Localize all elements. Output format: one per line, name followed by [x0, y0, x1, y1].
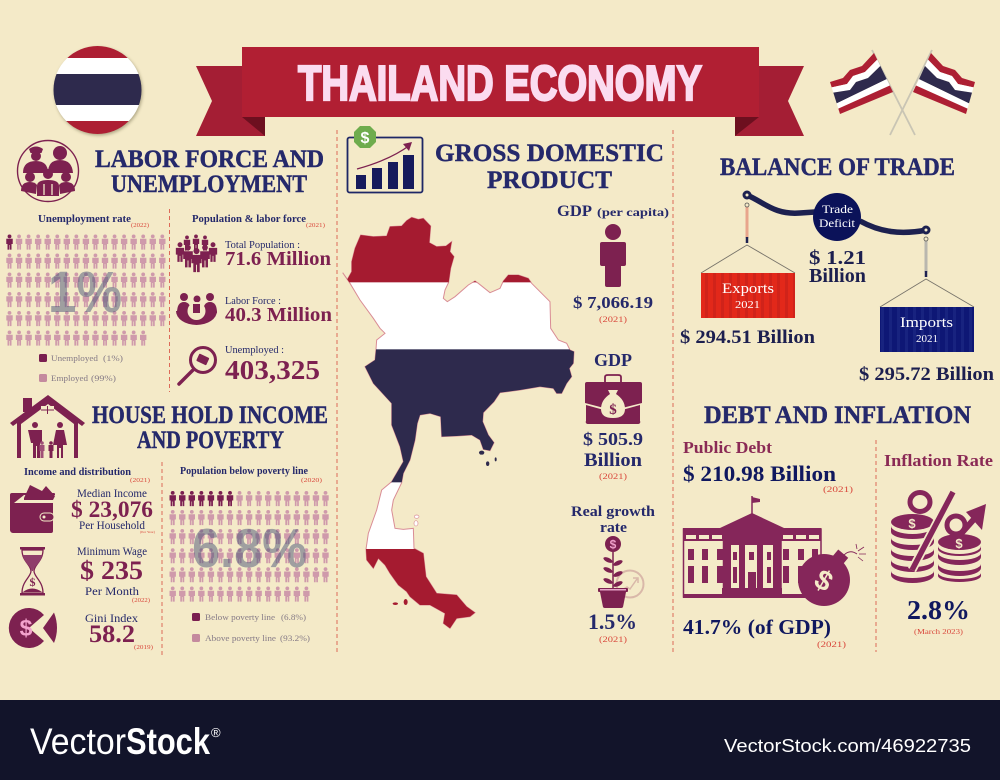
- minimum wage: Per Month: [85, 584, 139, 598]
- heading: DEBT AND INFLATION: [704, 402, 971, 429]
- gdp value: (2021): [599, 471, 627, 481]
- icon: government building: [683, 496, 821, 598]
- gdp per capita value: (2021): [599, 314, 627, 324]
- heading: BALANCE OF TRADE: [720, 154, 955, 181]
- minimum wage: Minimum Wage: [77, 546, 147, 558]
- footer logo: [30, 721, 221, 762]
- heading: LABOR FORCE AND: [95, 146, 324, 173]
- footer url: VectorStock.com/46922735: [724, 735, 971, 756]
- debt to gdp: (2021): [817, 639, 846, 649]
- diagram: trade scale: [701, 192, 974, 307]
- public debt value: (2021): [823, 484, 853, 494]
- unemployed: Unemployed :: [225, 345, 284, 356]
- icon: bomb: [798, 544, 866, 606]
- icon: coins and percent: $: [908, 516, 916, 531]
- minimum wage: (2022): [132, 597, 150, 604]
- legend: poverty: (93.2%): [280, 633, 310, 643]
- income label: Income and distribution: [24, 467, 131, 478]
- icon: money plant: $: [610, 538, 617, 552]
- icon: round Thai flag: [50, 44, 146, 136]
- icon: crowd: [176, 234, 217, 272]
- panel: debt and inflation: [683, 402, 993, 649]
- icon: money plant: [598, 536, 644, 608]
- real growth label: rate: [600, 520, 628, 536]
- debt to gdp: 41.7% (of GDP): [683, 615, 831, 639]
- icon: growth chart: $: [361, 130, 370, 147]
- icon: person: [600, 224, 626, 287]
- icon: workers circle: [18, 140, 78, 202]
- median income: Per Household: [79, 520, 145, 532]
- gdp per capita: GDP: [557, 203, 592, 220]
- imports container: Imports: [900, 315, 953, 331]
- unemployment rate label: Unemployment rate: [38, 214, 131, 225]
- heading: [92, 402, 328, 454]
- exports container: 2021: [735, 299, 760, 311]
- panel: gross domestic product: [340, 126, 669, 644]
- gdp value: $ 505.9: [583, 429, 643, 449]
- gdp value: [583, 429, 643, 481]
- gini index: (2019): [134, 644, 153, 651]
- heading: [435, 140, 664, 194]
- icon: labor force gear: [176, 293, 217, 325]
- public debt value: $ 210.98 Billion: [683, 461, 836, 486]
- unemployed: [225, 345, 320, 385]
- heading: GROSS DOMESTIC: [435, 140, 664, 167]
- pictogram: unemployment: [6, 234, 165, 346]
- heading: AND POVERTY: [137, 427, 284, 454]
- footer logo: Stock: [126, 721, 210, 762]
- median income: $ 23,076: [71, 497, 153, 522]
- heading: PRODUCT: [487, 167, 612, 194]
- gini index: 58.2: [89, 621, 135, 648]
- trade deficit badge: Deficit: [819, 216, 856, 230]
- title: THAILAND ECONOMY: [298, 57, 702, 111]
- gdp per capita: (per capita): [597, 205, 669, 219]
- big figure 1%: 1%: [48, 260, 122, 325]
- gdp per capita value: [573, 293, 653, 324]
- legend: poverty: Below poverty line: [205, 612, 275, 622]
- imports container: [880, 307, 974, 352]
- exports container: Exports: [722, 281, 774, 297]
- trade deficit badge: Trade: [822, 202, 853, 216]
- legend: unemployment: Employed: [51, 373, 89, 383]
- inflation value: 2.8%: [907, 595, 970, 625]
- gini index: Gini Index: [85, 611, 138, 625]
- gdp per capita: [557, 203, 669, 220]
- legend: poverty: (6.8%): [281, 612, 306, 622]
- gdp per capita value: $ 7,066.19: [573, 293, 653, 312]
- exports value: $ 294.51 Billion: [680, 327, 815, 348]
- panel: labor force and unemployment: [6, 140, 332, 385]
- column dividers: [162, 130, 876, 655]
- icon: coins and percent: $: [955, 536, 963, 551]
- minimum wage: $ 235: [80, 556, 143, 585]
- inflation value: (March 2023): [914, 628, 964, 636]
- real growth value: 1.5%: [588, 609, 637, 634]
- minimum wage: [77, 546, 150, 604]
- gdp value: Billion: [584, 450, 642, 471]
- exports container: [701, 273, 795, 318]
- real growth value: (2021): [599, 634, 627, 644]
- legend: unemployment: (99%): [91, 373, 116, 383]
- icon: gini pie: [9, 608, 57, 648]
- inflation label: Inflation Rate: [884, 451, 993, 470]
- labor force: Labor Force :: [225, 296, 281, 307]
- map: Thailand flag-filled: [340, 213, 580, 632]
- legend: unemployment: Unemployed: [51, 353, 99, 363]
- icon: house with family: [10, 395, 85, 458]
- real growth label: [571, 504, 655, 536]
- trade deficit badge: [813, 193, 861, 241]
- total population: 71.6 Million: [225, 248, 331, 270]
- median income: [71, 488, 155, 534]
- imports value: $ 295.72 Billion: [859, 364, 994, 385]
- icon: growth chart: [348, 126, 422, 192]
- footer logo: Vector: [30, 721, 126, 762]
- icon: hourglass: [20, 547, 45, 596]
- population label: Population & labor force: [192, 214, 306, 225]
- real growth label: Real growth: [571, 504, 655, 520]
- icon: bomb: $: [809, 563, 839, 598]
- gdp label: GDP: [594, 350, 632, 370]
- unemployed: 403,325: [225, 355, 320, 385]
- panel: household income and poverty: [9, 395, 329, 651]
- trade deficit value: Billion: [809, 265, 866, 287]
- icon: magnifier with briefcase: [179, 348, 216, 384]
- unemployment rate label: [38, 214, 149, 229]
- unemployment rate label: (2022): [131, 222, 149, 229]
- debt to gdp: [683, 615, 846, 649]
- poverty label: (2020): [301, 477, 322, 484]
- icon: hourglass: $: [30, 575, 36, 589]
- big figure 6.8%: 6.8%: [192, 517, 307, 579]
- heading: HOUSE HOLD INCOME: [92, 402, 328, 429]
- population label: (2021): [306, 222, 325, 229]
- gini index: [85, 611, 153, 651]
- legend: poverty: [192, 612, 310, 643]
- public debt label: Public Debt: [683, 438, 773, 457]
- icon: briefcase money: [585, 375, 642, 424]
- title banner: [196, 47, 804, 136]
- legend: poverty: Above poverty line: [205, 633, 276, 643]
- heading: [95, 146, 324, 198]
- legend: unemployment: (1%): [103, 353, 123, 363]
- income label: (2021): [130, 477, 150, 484]
- total population: Total Population :: [225, 240, 300, 251]
- icon: wallet: [10, 485, 55, 533]
- poverty label: Population below poverty line: [180, 466, 308, 477]
- imports container: 2021: [916, 333, 938, 345]
- income label: [24, 467, 150, 484]
- population label: [192, 214, 325, 229]
- median income: (Per Year): [140, 530, 155, 534]
- panel: balance of trade: [680, 154, 994, 385]
- icon: crossed flags: [830, 50, 975, 135]
- legend: unemployment: [39, 353, 123, 383]
- median income: Median Income: [77, 488, 147, 500]
- trade deficit value: [809, 247, 866, 287]
- icon: coins and percent: [891, 492, 986, 583]
- poverty label: [180, 466, 322, 484]
- icon: briefcase money: $: [609, 402, 617, 418]
- footer bar: [0, 700, 1000, 780]
- icon: gini pie: $: [20, 615, 33, 641]
- labor force: 40.3 Million: [225, 304, 332, 326]
- pictogram: poverty: [170, 491, 329, 602]
- trade deficit value: $ 1.21: [809, 247, 866, 269]
- heading: UNEMPLOYMENT: [111, 171, 307, 198]
- public debt value: [683, 461, 853, 494]
- footer logo: ®: [211, 725, 221, 740]
